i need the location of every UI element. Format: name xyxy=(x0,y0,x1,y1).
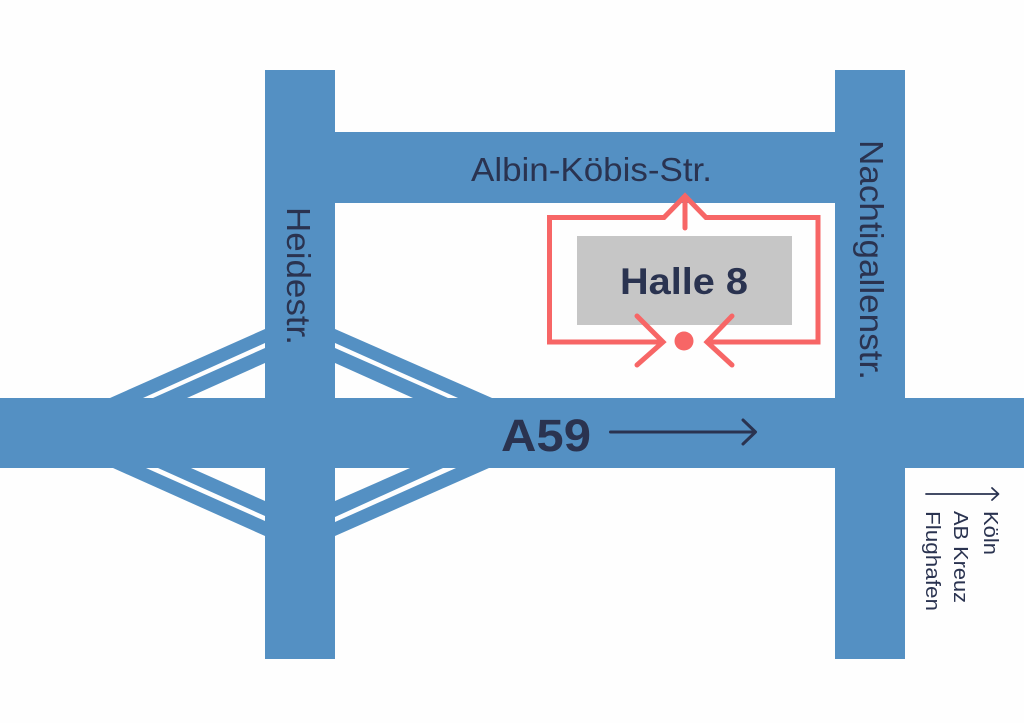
arrow: A59 direction xyxy=(610,420,756,444)
road: Albin-Köbis-Str. xyxy=(335,132,835,203)
arrow: direction Köln xyxy=(926,488,998,500)
label: Nachtigallenstr.: Nachtigallenstr. xyxy=(853,140,890,380)
label: Heidestr.: Heidestr. xyxy=(280,207,317,345)
label: Albin-Köbis-Str.: Albin-Köbis-Str. xyxy=(471,151,712,188)
road: Heidestr. xyxy=(265,70,335,659)
destination labels xyxy=(921,511,1001,611)
road: Nachtigallenstr. xyxy=(835,70,905,659)
location marker xyxy=(674,332,694,350)
label: Flughafen: Flughafen xyxy=(921,511,943,611)
road: A59 xyxy=(0,398,1024,468)
label: Köln: Köln xyxy=(979,511,1001,555)
label: AB Kreuz: AB Kreuz xyxy=(949,511,971,603)
motorway junction ramps xyxy=(110,329,492,536)
route around building with arrows xyxy=(550,196,818,365)
building: Halle 8 xyxy=(577,236,792,325)
label: A59: A59 xyxy=(501,410,591,461)
label: Halle 8: Halle 8 xyxy=(620,261,748,302)
